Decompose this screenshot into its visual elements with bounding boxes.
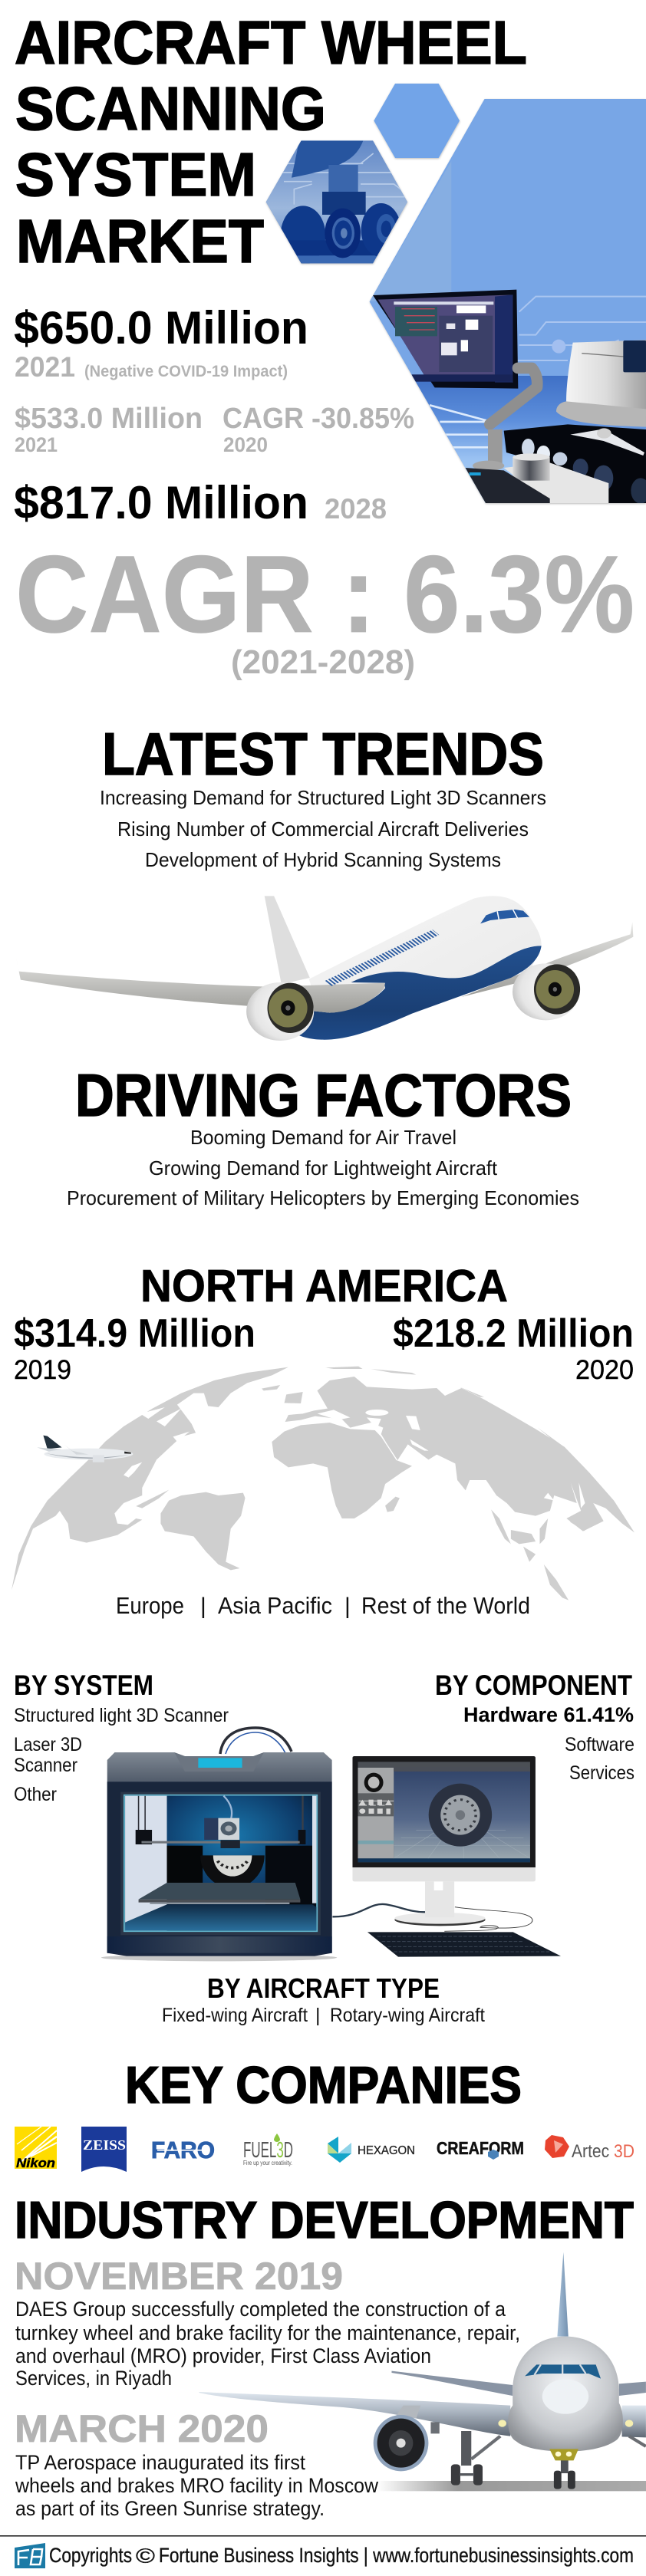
- company logos: [15, 2127, 634, 2172]
- trend list: Increasing Demand for Structured Light 3D Scanners: [100, 786, 546, 809]
- factors list: Procurement of Military Helicopters by Emerging Economies: [67, 1186, 579, 1209]
- illustration: airliner front view: [199, 2252, 646, 2491]
- development: March 2020: [15, 2407, 378, 2520]
- panel: by component: [435, 1670, 634, 1784]
- footer: [0, 2535, 646, 2568]
- world map: [12, 1367, 634, 1601]
- logo: Nikon: Nikon: [16, 2156, 55, 2170]
- panel: by aircraft type: [162, 1972, 485, 2026]
- heading: BY SYSTEM: [14, 1670, 153, 1701]
- scanner machine: [466, 340, 646, 504]
- stat: 533.0 million: 2021: [15, 433, 58, 456]
- title: SYSTEM: [15, 140, 256, 209]
- aircraft type list: |: [315, 2005, 321, 2026]
- silver cylinder: [513, 457, 550, 481]
- stat: CAGR 2020: CAGR -30.85%: [222, 403, 414, 435]
- system list: Laser 3D: [14, 1734, 82, 1755]
- connecting cable: [332, 1904, 425, 1916]
- region list: Rest of the World: [361, 1592, 530, 1619]
- logo: Zeiss: [81, 2127, 127, 2172]
- title: AIRCRAFT WHEEL: [15, 8, 527, 77]
- heading: key companies: KEY COMPANIES: [125, 2056, 522, 2114]
- panel: north america: [14, 1261, 634, 1385]
- copyright text: Copyrights: [49, 2544, 132, 2567]
- hardware share: Hardware 61.41%: [463, 1703, 634, 1726]
- stat: 2020: [393, 1311, 634, 1385]
- dome: [566, 340, 646, 416]
- component list: Software: [565, 1734, 634, 1755]
- knobs: [522, 439, 535, 454]
- system list: Other: [14, 1784, 57, 1805]
- stat: 2019: 2019: [14, 1355, 71, 1385]
- description: turnkey wheel and brake facility for the maintenance, repair,: [15, 2321, 520, 2344]
- region list: |: [344, 1594, 351, 1619]
- stat: 2020: 2020: [575, 1355, 634, 1385]
- illustration: 3D printer: [101, 1728, 337, 1961]
- logo: Zeiss: ZEISS: [83, 2137, 126, 2153]
- system list: Structured light 3D Scanner: [14, 1705, 229, 1726]
- trend list: Development of Hybrid Scanning Systems: [145, 848, 501, 871]
- landing gear: [451, 2431, 646, 2489]
- stat: 533.0 million: [15, 403, 203, 456]
- region list: Europe: [116, 1592, 184, 1619]
- right engine: [513, 963, 580, 1020]
- ground shadow: [377, 2481, 646, 2491]
- engine: [374, 2415, 428, 2471]
- small blue hexagon: [374, 84, 460, 158]
- keyboard: [466, 468, 550, 504]
- panel: driving factors: [67, 1061, 579, 1209]
- fuselage nose: [498, 2337, 633, 2460]
- logo: Fuel3D: FUEL3D: [243, 2138, 293, 2163]
- monitor stand: [394, 1913, 486, 1926]
- logo: Hexagon: [328, 2137, 415, 2163]
- description: TP Aerospace inaugurated its first: [15, 2451, 305, 2474]
- stat: 650.0 million: $650.0 Million: [14, 302, 308, 354]
- left engine: [246, 982, 314, 1041]
- region list: Asia Pacific: [218, 1592, 332, 1619]
- stat: CAGR 2020: [222, 403, 414, 456]
- stat: 2019: [14, 1311, 255, 1385]
- system list: Scanner: [14, 1755, 77, 1776]
- monitor arm: [489, 368, 537, 424]
- region list: |: [200, 1594, 206, 1619]
- printer cables: [220, 1728, 292, 1754]
- big CAGR: (2021-2028): [231, 643, 415, 681]
- white plate: [504, 462, 608, 504]
- control display: [198, 1758, 242, 1768]
- factors list: Growing Demand for Lightweight Aircraft: [149, 1156, 498, 1179]
- description: Services, in Riyadh: [15, 2367, 172, 2390]
- illustration: airliner in flight: [15, 896, 633, 1041]
- description: [15, 2451, 378, 2520]
- logo: Nikon: [15, 2127, 57, 2170]
- region list: [116, 1592, 530, 1619]
- description: and overhaul (MRO) provider, First Class Aviation: [15, 2344, 431, 2367]
- stat: 533.0 million: $533.0 Million: [15, 403, 203, 435]
- trend list: [100, 786, 546, 871]
- stats: market size figures: [14, 302, 634, 681]
- aircraft type list: Rotary-wing Aircraft: [330, 2005, 485, 2026]
- stat year note: 2021: [15, 351, 75, 383]
- description: DAES Group successfully completed the construction of a: [15, 2298, 506, 2321]
- heading: NORTH AMERICA: [140, 1261, 508, 1311]
- date: MARCH 2020: [15, 2407, 269, 2450]
- logo: Artec 3D: [545, 2135, 634, 2162]
- stat year note: [15, 351, 288, 383]
- stat year note: (Negative COVID-19 Impact): [84, 363, 288, 380]
- development: November 2019: [15, 2255, 520, 2390]
- heading: LATEST TRENDS: [102, 720, 544, 788]
- copyright text: ©: [136, 2545, 155, 2568]
- date: NOVEMBER 2019: [15, 2255, 343, 2298]
- description: wheels and brakes MRO facility in Moscow: [15, 2474, 378, 2497]
- panel: latest trends: [100, 720, 546, 871]
- large hexagon photo: scanner workstation: [363, 97, 646, 506]
- stat: 2019: $314.9 Million: [14, 1311, 255, 1356]
- factors list: Booming Demand for Air Travel: [190, 1126, 456, 1149]
- keyboard: [367, 1932, 561, 1957]
- mouse cable: [444, 1907, 532, 1931]
- title: MARKET: [16, 207, 264, 275]
- title: SCANNING: [15, 74, 326, 143]
- trend list: Rising Number of Commercial Aircraft Deliveries: [117, 818, 529, 841]
- component list: [565, 1734, 634, 1784]
- aircraft type list: Fixed-wing Aircraft: [162, 2005, 308, 2026]
- logo: Fuel3D: [243, 2134, 293, 2166]
- logo: Creaform: CREAFORM: [437, 2138, 524, 2158]
- stat: 817.0 million: 2028: [325, 493, 387, 525]
- stat: 2020: $218.2 Million: [393, 1311, 634, 1356]
- logo: Hexagon: HEXAGON: [358, 2144, 415, 2157]
- print chamber: [124, 1795, 317, 1931]
- heading: BY AIRCRAFT TYPE: [207, 1972, 440, 2004]
- monitor: [373, 290, 518, 389]
- icon: small airliner: [37, 1436, 133, 1462]
- heading: DRIVING FACTORS: [75, 1061, 572, 1129]
- monitor screen: [352, 1756, 536, 1881]
- machine bed: [504, 424, 646, 504]
- panel: by system: [14, 1670, 229, 1805]
- factors list: [67, 1126, 579, 1209]
- aircraft type list: [162, 2005, 485, 2026]
- icon: Fortune Business Insights logo: [15, 2543, 45, 2568]
- component list: Services: [569, 1762, 634, 1784]
- logo: Fuel3D: Fire up your creativity.: [243, 2160, 292, 2166]
- title: [15, 8, 527, 275]
- stat: 817.0 million: $817.0 Million: [14, 477, 308, 528]
- description: as part of its Green Sunrise strategy.: [15, 2497, 325, 2520]
- system list: [14, 1705, 229, 1805]
- illustration: monitor and keyboard: [332, 1756, 561, 1957]
- hexagon photo: landing gear: [261, 138, 414, 266]
- stat: CAGR 2020: 2020: [223, 433, 268, 456]
- hero image: hexagon collage: [261, 84, 646, 506]
- logo: FARO: FARO: [151, 2137, 215, 2163]
- logo: Artec 3D: Artec 3D: [572, 2141, 634, 2162]
- description: [15, 2298, 520, 2390]
